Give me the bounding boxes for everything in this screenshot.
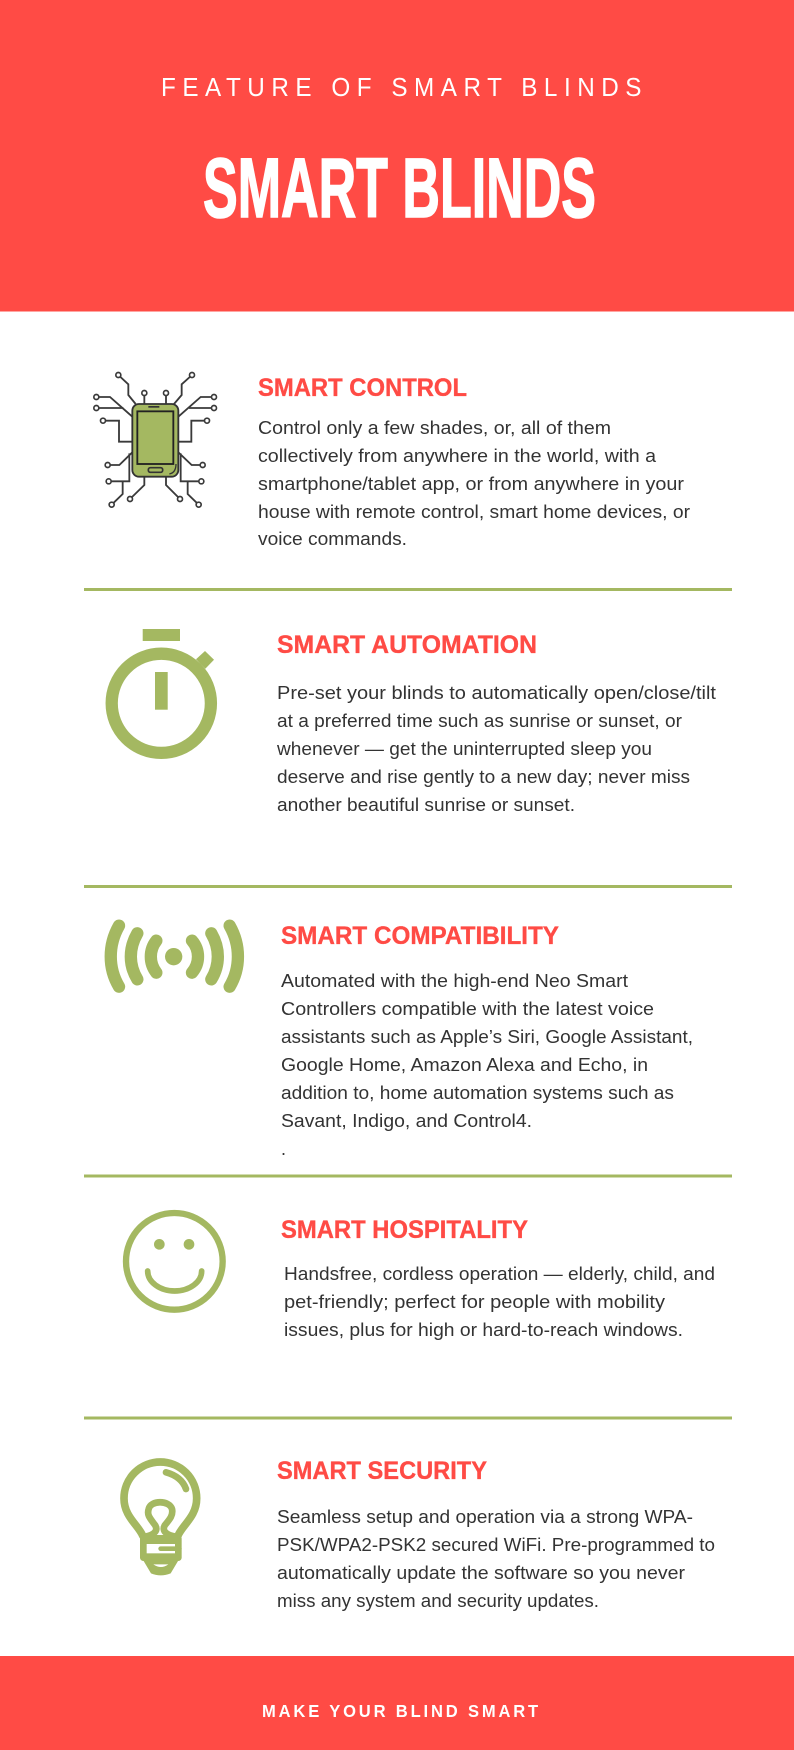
header banner xyxy=(0,0,794,312)
footer banner xyxy=(0,1656,794,1750)
body text: voice commands. xyxy=(258,529,407,549)
body text: deserve and rise gently to a new day; never miss xyxy=(277,767,690,787)
body text: automatically update the software so you never xyxy=(277,1563,685,1583)
body text: whenever — get the uninterrupted sleep you xyxy=(276,739,652,759)
body text xyxy=(276,683,716,815)
body text: . xyxy=(281,1139,286,1159)
icon: light bulb xyxy=(124,1462,197,1575)
panel: smart control xyxy=(94,372,690,549)
body text: assistants such as Apple’s Siri, Google Assistant, xyxy=(281,1027,693,1047)
panel: smart hospitality xyxy=(126,1213,715,1340)
body text: Handsfree, cordless operation — elderly, child, and xyxy=(284,1264,715,1284)
body text: Control only a few shades, or, all of them xyxy=(258,418,611,438)
icon: stopwatch xyxy=(112,629,214,753)
body text: Google Home, Amazon Alexa and Echo, in xyxy=(281,1055,648,1075)
body text xyxy=(277,1507,715,1611)
body text: Pre-set your blinds to automatically open/close/tilt xyxy=(277,683,716,703)
body text: pet-friendly; perfect for people with mobility xyxy=(284,1292,665,1312)
heading: SMART HOSPITALITY xyxy=(281,1216,528,1244)
body text: miss any system and security updates. xyxy=(277,1591,599,1611)
body text: at a preferred time such as sunrise or sunset, or xyxy=(277,711,682,731)
panel: smart compatibility xyxy=(111,922,693,1159)
body text xyxy=(284,1264,715,1340)
body text: another beautiful sunrise or sunset. xyxy=(277,795,575,815)
body text: Savant, Indigo, and Control4. xyxy=(281,1111,532,1131)
body text: collectively from anywhere in the world, with a xyxy=(258,446,657,466)
body text xyxy=(258,418,690,549)
body text: addition to, home automation systems such as xyxy=(281,1083,674,1103)
body text xyxy=(281,971,693,1159)
heading: SMART COMPATIBILITY xyxy=(281,922,559,950)
subtitle: FEATURE OF SMART BLINDS xyxy=(161,72,648,102)
body text: Controllers compatible with the latest voice xyxy=(281,999,654,1019)
body text: Seamless setup and operation via a strong WPA- xyxy=(277,1507,693,1527)
body text: smartphone/tablet app, or from anywhere in your xyxy=(258,474,684,494)
icon: smiley face xyxy=(126,1213,223,1310)
footer text: MAKE YOUR BLIND SMART xyxy=(262,1701,541,1721)
icon: wireless signal xyxy=(111,926,238,987)
body text: Automated with the high-end Neo Smart xyxy=(281,971,628,991)
icon: smartphone with circuit traces xyxy=(94,372,216,507)
body text: PSK/WPA2-PSK2 secured WiFi. Pre-programmed to xyxy=(277,1535,715,1555)
heading: SMART CONTROL xyxy=(258,374,467,402)
panel: smart automation xyxy=(112,629,716,815)
body text: house with remote control, smart home devices, or xyxy=(258,502,690,522)
panel: smart security xyxy=(124,1457,715,1611)
heading: SMART AUTOMATION xyxy=(277,631,537,659)
heading: SMART SECURITY xyxy=(277,1457,487,1485)
body text: issues, plus for high or hard-to-reach windows. xyxy=(284,1320,683,1340)
